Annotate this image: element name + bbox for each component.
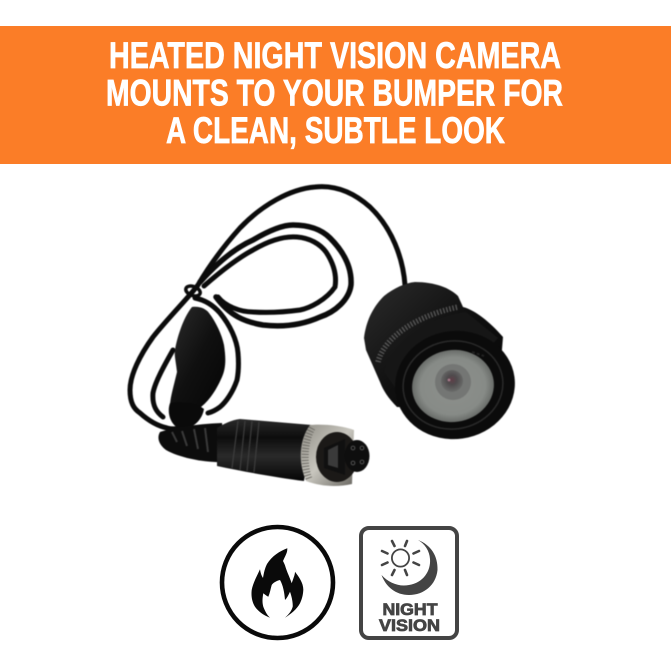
camera housing (364, 282, 522, 447)
connector body (217, 419, 312, 481)
icon: night vision badge (361, 528, 457, 638)
badge text (379, 600, 440, 635)
connector socket with four pins (324, 439, 370, 475)
flame shape (251, 548, 303, 618)
cable loops (130, 187, 405, 429)
title text (106, 35, 563, 151)
connector knurled ring (301, 425, 354, 486)
molded junction (170, 307, 225, 411)
product photo: camera with cable and connector (130, 187, 522, 486)
crescent moon (382, 540, 438, 595)
icon: heated flame in circle (222, 527, 333, 638)
badge text: NIGHT (382, 600, 438, 619)
orange title banner (0, 26, 671, 164)
camera lens window (407, 345, 499, 427)
badge text: VISION (379, 616, 440, 635)
strain relief (158, 423, 226, 462)
sun (382, 541, 419, 575)
title text: A CLEAN, SUBTLE LOOK (166, 110, 505, 151)
